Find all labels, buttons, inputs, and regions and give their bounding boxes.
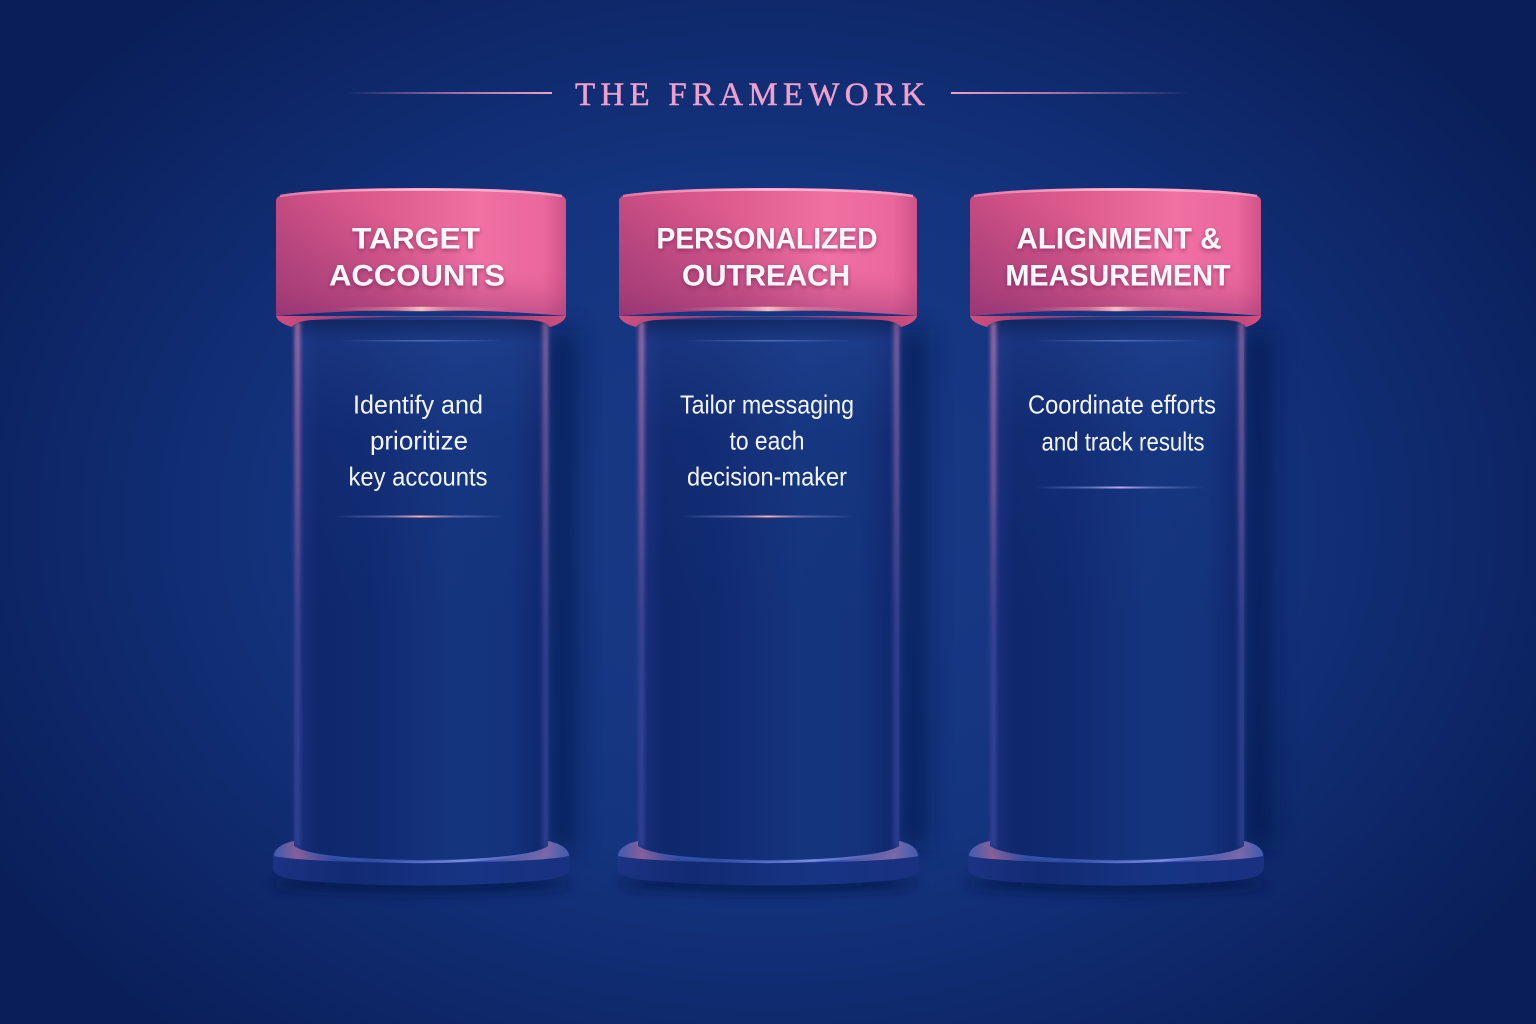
bottom divider (680, 516, 855, 518)
top divider (685, 340, 853, 342)
description: and track results (1042, 426, 1204, 456)
pillar shadow (550, 330, 576, 850)
base plinth (617, 800, 919, 886)
description: decision-maker (687, 462, 847, 492)
heading: TARGET (352, 222, 480, 256)
body edge highlights (639, 322, 899, 847)
base shadow (617, 875, 919, 893)
description (348, 390, 488, 492)
base shadow (966, 875, 1266, 893)
description: to each (730, 426, 804, 456)
heading (656, 222, 878, 292)
description (1028, 390, 1216, 456)
pillar body (990, 316, 1244, 816)
panel: target accounts pillar (271, 188, 576, 893)
pillar body (638, 316, 899, 816)
bottom divider (335, 516, 505, 518)
title rule right (951, 92, 1191, 94)
base shadow (271, 875, 571, 893)
description: Identify and (353, 390, 483, 420)
description: key accounts (348, 462, 488, 492)
top divider (1035, 340, 1203, 342)
description (680, 390, 854, 492)
pink header cap (619, 188, 917, 327)
heading: MEASUREMENT (1006, 260, 1230, 292)
pillar shadow (1246, 330, 1272, 850)
pink header cap (276, 188, 566, 327)
heading: ACCOUNTS (329, 260, 505, 292)
heading (329, 222, 505, 292)
pillar body (294, 316, 548, 816)
pink header cap (970, 188, 1261, 327)
top divider (340, 340, 505, 342)
panel: alignment and measurement pillar (966, 188, 1272, 893)
body edge highlights (295, 322, 548, 847)
heading: ALIGNMENT & (1016, 222, 1222, 256)
panel: personalized outreach pillar (617, 188, 927, 893)
bottom divider (1035, 486, 1205, 488)
pillar shadow (901, 330, 927, 850)
title text: THE FRAMEWORK (575, 77, 925, 113)
description: prioritize (370, 426, 468, 456)
description: Tailor messaging (680, 390, 854, 420)
heading: PERSONALIZED (656, 222, 878, 256)
heading (1006, 222, 1230, 292)
base plinth (968, 800, 1264, 886)
base plinth (273, 800, 570, 886)
body edge highlights (991, 322, 1244, 847)
title rule left (345, 92, 552, 94)
heading: OUTREACH (682, 260, 850, 292)
description: Coordinate efforts (1028, 390, 1216, 420)
